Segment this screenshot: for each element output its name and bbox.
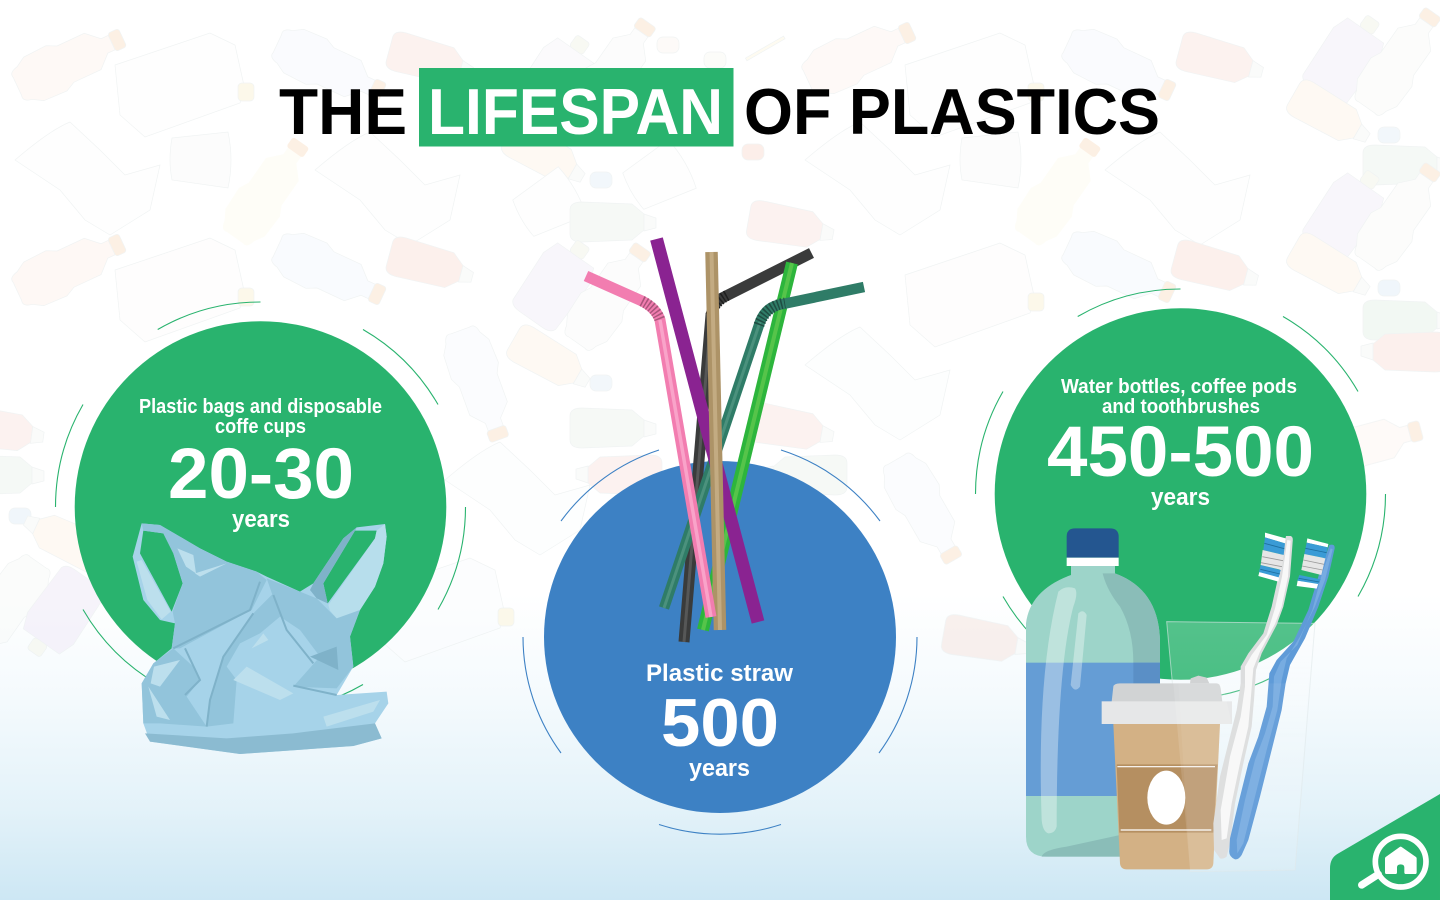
green straw [703, 263, 792, 630]
green circle [995, 308, 1366, 680]
panel: bottles and brushes: years [1151, 484, 1210, 511]
panel: plastic bags [56, 302, 466, 754]
icon: coffee cup [1102, 676, 1232, 869]
decorative ring arcs [56, 302, 466, 712]
title: THE [279, 75, 407, 148]
panel: plastic bags: coffe cups [215, 416, 306, 438]
icon: blue toothbrush [1229, 538, 1335, 859]
icon: water bottle [1026, 528, 1160, 857]
teal straw [664, 287, 864, 608]
panel: plastic straw [523, 239, 917, 834]
logo [1330, 794, 1440, 900]
number: 450-500 [1047, 413, 1314, 492]
panel: bottles and brushes: and toothbrushes [1102, 396, 1260, 418]
icon: white toothbrush [1213, 533, 1293, 859]
decorative ring arcs [523, 450, 917, 834]
decorative ring arcs [976, 289, 1386, 699]
icon: straws [586, 239, 864, 642]
title highlight: LIFESPAN [428, 75, 723, 148]
panel: plastic bags: years [232, 506, 290, 533]
label text: Plastic bags and disposable [139, 396, 382, 418]
pink straw [586, 276, 711, 617]
black straw [684, 253, 812, 642]
background pattern of faint plastic items [0, 0, 1440, 672]
icon: plastic bag [133, 523, 388, 754]
label text: Plastic straw [646, 660, 793, 687]
title: OF PLASTICS [744, 75, 1160, 148]
label text: Water bottles, coffee pods [1061, 376, 1297, 398]
number: 20-30 [168, 435, 354, 514]
number: 500 [661, 685, 779, 761]
panel: bottles and brushes [976, 289, 1440, 900]
title [279, 68, 1160, 148]
panel: plastic straw: years [689, 755, 750, 782]
purple straw [656, 239, 758, 622]
tan straw [712, 252, 720, 630]
green circle [75, 321, 446, 693]
icon: glass front [1178, 683, 1308, 872]
icon: glass back [1167, 622, 1315, 872]
blue circle [544, 461, 896, 813]
